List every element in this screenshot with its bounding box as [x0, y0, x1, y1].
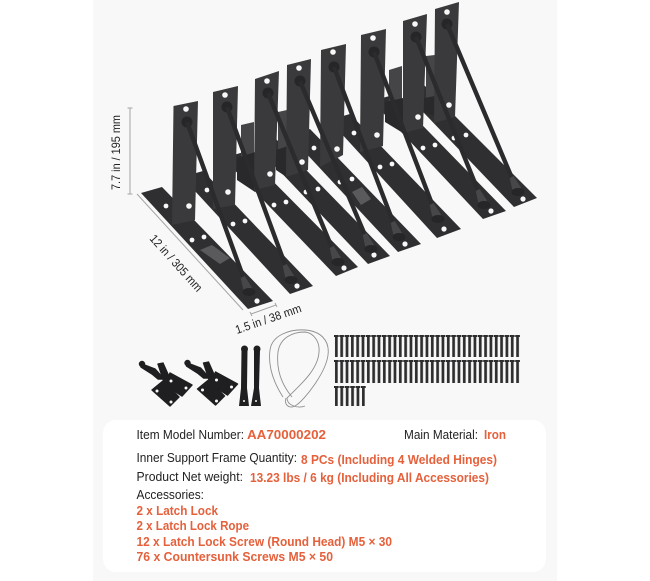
- model number: Item Model Number:: [136, 427, 244, 442]
- icon: latch straps: [239, 346, 261, 406]
- frame 5: [289, 44, 421, 252]
- dimension: length: 12 in / 305 mm: [147, 232, 205, 295]
- net weight: [136, 469, 489, 485]
- frame 1: [141, 101, 273, 309]
- frame 4: [255, 59, 390, 264]
- accessories list: Accessories:: [136, 487, 204, 502]
- frame 6: [329, 29, 461, 238]
- icon: latch lock 1: [140, 362, 192, 406]
- bracket set: eight support frames: [141, 2, 537, 309]
- main material: Main Material:: [404, 427, 478, 442]
- accessories list: [136, 487, 392, 564]
- icon: latch lock 2: [185, 360, 238, 405]
- model number: AA70000202: [247, 427, 326, 442]
- screws row 3: [334, 386, 366, 406]
- frame quantity: 8 PCs (Including 4 Welded Hinges): [301, 452, 497, 467]
- accessories list: 2 x Latch Lock Rope: [136, 518, 249, 533]
- screws row 2: [334, 360, 520, 383]
- frame quantity: Inner Support Frame Quantity:: [136, 450, 297, 465]
- frame 8: [403, 2, 537, 207]
- frame 7: [372, 14, 506, 219]
- background panel: [93, 0, 557, 581]
- dimension: height: 7.7 in / 195 mm: [109, 115, 123, 190]
- frame 3: [223, 71, 358, 276]
- model number: [136, 427, 326, 442]
- specification panel: [103, 420, 546, 572]
- net weight: 13.23 lbs / 6 kg (Including All Accessories): [250, 470, 489, 485]
- main material: Iron: [484, 427, 506, 442]
- dimension: height: [109, 108, 132, 194]
- accessories list: 76 x Countersunk Screws M5 × 50: [136, 549, 333, 564]
- accessories list: 2 x Latch Lock: [136, 503, 219, 518]
- icon: latch lock ropes: [270, 330, 328, 407]
- dimension: length: [137, 194, 243, 310]
- net weight: Product Net weight:: [136, 469, 243, 484]
- dimension: width: 1.5 in / 38 mm: [233, 301, 303, 337]
- screws row 1: [334, 335, 520, 357]
- frame 2: [182, 86, 313, 294]
- frame quantity: [136, 450, 497, 467]
- accessories list: 12 x Latch Lock Screw (Round Head) M5 × 30: [136, 534, 392, 549]
